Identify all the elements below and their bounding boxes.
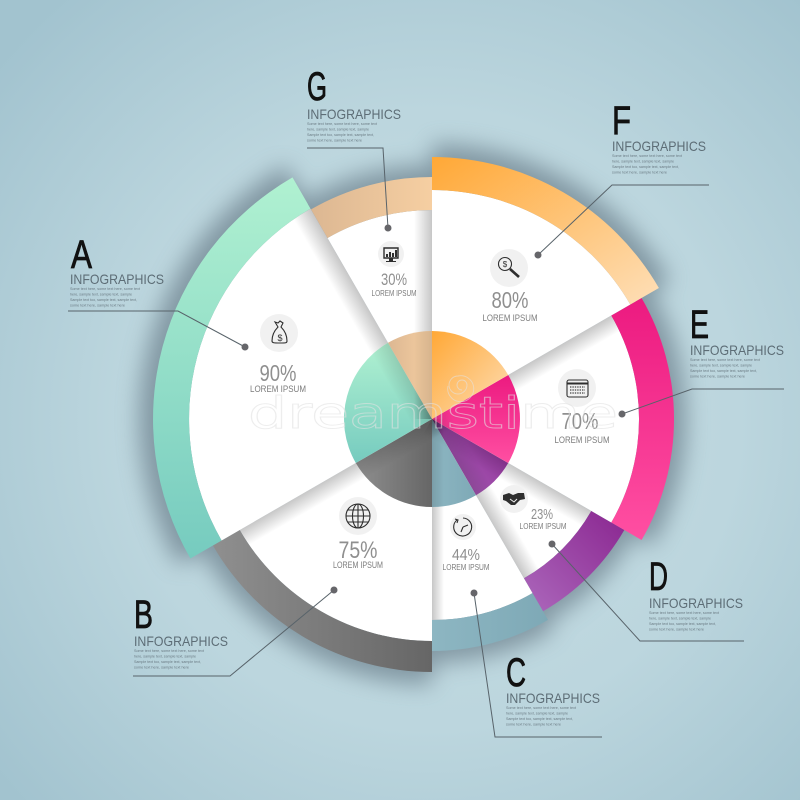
body text G: Sample text too, sample text, sample text, [307, 132, 374, 137]
label: lorem ipsum: LOREM IPSUM [372, 289, 417, 298]
centre wedge: G [388, 331, 432, 419]
leader dot A [242, 344, 248, 350]
centre wedge: C [432, 419, 476, 507]
panel: segment F [432, 99, 709, 419]
icon: magnifier [490, 249, 528, 287]
watermark: dreamstime [248, 388, 618, 439]
ring: F orange [432, 157, 659, 304]
body text E: some text here, sample text here [690, 374, 746, 378]
body text E: here, sample text, sample text, sample [690, 362, 753, 368]
value: 80%: 80% [492, 287, 528, 313]
body text F: Sample text too, sample text, sample text, [612, 164, 679, 169]
label: lorem ipsum: LOREM IPSUM [554, 435, 610, 445]
watermark [248, 376, 618, 439]
value: 44%: 44% [452, 547, 480, 564]
body text B: some text here, sample text here [134, 664, 190, 670]
icon: magnifier: $ [503, 260, 508, 269]
label: lorem ipsum: LOREM IPSUM [250, 384, 306, 394]
body text G [307, 121, 378, 142]
centre wedge: B [356, 419, 432, 507]
heading: F: F [612, 99, 631, 143]
ring: G peach [311, 177, 432, 238]
title: B infographics: INFOGRAPHICS [134, 633, 228, 649]
body text D: Sample text too, sample text, sample text, [649, 621, 716, 626]
label: lorem ipsum: LOREM IPSUM [442, 563, 490, 572]
icon: chart monitor [378, 241, 404, 267]
icon: money bag: $ [277, 333, 283, 343]
heading: B: B [134, 593, 153, 637]
body text G: Some text here, some text here, some text [307, 121, 378, 126]
label: lorem ipsum: LOREM IPSUM [520, 522, 567, 531]
body text B: Sample text too, sample text, sample text, [134, 659, 201, 664]
heading: D: D [649, 555, 668, 599]
heading: C: C [506, 651, 526, 695]
leader line G [307, 148, 388, 228]
body text C: here, sample text, sample text, sample [506, 710, 569, 716]
title: C infographics: INFOGRAPHICS [506, 690, 600, 706]
body text E [690, 357, 761, 378]
panel: segment D [423, 410, 744, 641]
body text B: here, sample text, sample text, sample [134, 654, 197, 658]
body text D: Some text here, some text here, some text [649, 610, 720, 615]
leader line A [68, 311, 245, 347]
panel: segment G [307, 65, 432, 419]
body text F [612, 153, 683, 174]
value: 23%: 23% [531, 506, 553, 523]
leader line B [133, 590, 334, 676]
ring: C blue [432, 593, 548, 651]
body text A [70, 286, 141, 308]
icon: globe [339, 497, 377, 535]
ring: D purple [524, 511, 624, 611]
title: E infographics: INFOGRAPHICS [690, 342, 784, 358]
panel: segment E [432, 298, 784, 540]
centre disc edge shading [356, 331, 508, 507]
body text E: Some text here, some text here, some text [690, 357, 761, 362]
body text F: here, sample text, sample text, sample [612, 158, 675, 164]
icon: clock arrow [450, 514, 476, 540]
leader dot B [330, 586, 338, 594]
body text C: Sample text too, sample text, sample text, [506, 716, 573, 721]
ring: E pink [611, 298, 674, 540]
heading: G: G [307, 65, 327, 109]
body text E: Sample text too, sample text, sample text, [690, 368, 757, 373]
title: G infographics: INFOGRAPHICS [307, 106, 401, 122]
body text G: some text here, sample text here [307, 138, 363, 142]
body text A: Sample text too, sample text, sample text, [70, 297, 137, 302]
leader line F [538, 185, 709, 255]
body text C: Some text here, some text here, some text [506, 705, 577, 710]
leader dot F [534, 252, 542, 258]
leader dot E [618, 410, 626, 418]
body text F: Some text here, some text here, some text [612, 153, 683, 158]
leader line E [622, 389, 784, 414]
panel: segment A [68, 177, 432, 558]
leader line D [552, 544, 744, 641]
value: 90%: 90% [260, 360, 296, 386]
heading: A: A [71, 233, 92, 277]
body text C [506, 705, 577, 726]
body text C: some text here, sample text here [506, 722, 562, 726]
title: D infographics: INFOGRAPHICS [649, 595, 743, 611]
leader dot D [548, 540, 556, 548]
body text A: here, sample text, sample text, sample [70, 292, 133, 296]
leader dot C [470, 590, 478, 596]
title: F infographics: INFOGRAPHICS [612, 138, 706, 154]
value: 70%: 70% [562, 408, 598, 434]
centre wedge: A [344, 343, 432, 463]
value: 30%: 30% [381, 270, 407, 289]
value: 75%: 75% [338, 537, 378, 564]
centre wedge: F [432, 331, 508, 419]
ring: B gray [213, 530, 432, 672]
icon: handshake [500, 485, 528, 513]
label: lorem ipsum: LOREM IPSUM [333, 560, 383, 570]
title: A infographics: INFOGRAPHICS [70, 271, 164, 287]
centre wedge: D [432, 419, 508, 495]
panel: segment B [133, 419, 441, 676]
body text D [649, 610, 720, 632]
body text A: some text here, sample text here [70, 302, 126, 308]
body text G: here, sample text, sample text, sample [307, 126, 370, 132]
leader line C [474, 593, 602, 737]
body text B [134, 648, 205, 670]
icon: money bag [260, 314, 298, 352]
body text B: Some text here, some text here, some text [134, 648, 205, 653]
icon: calendar [558, 369, 596, 407]
centre wedge: E [432, 375, 520, 463]
body text F: some text here, sample text here [612, 170, 668, 174]
drop shadow behind wheel [139, 144, 686, 685]
leader dot G [384, 224, 392, 232]
body text D: here, sample text, sample text, sample [649, 616, 712, 620]
ring: A mint [153, 177, 310, 558]
body text A: Some text here, some text here, some text [70, 286, 141, 291]
body text D: some text here, sample text here [649, 626, 705, 632]
heading: E: E [690, 303, 709, 347]
panel: segment C [432, 419, 602, 737]
label: lorem ipsum: LOREM IPSUM [482, 313, 538, 323]
